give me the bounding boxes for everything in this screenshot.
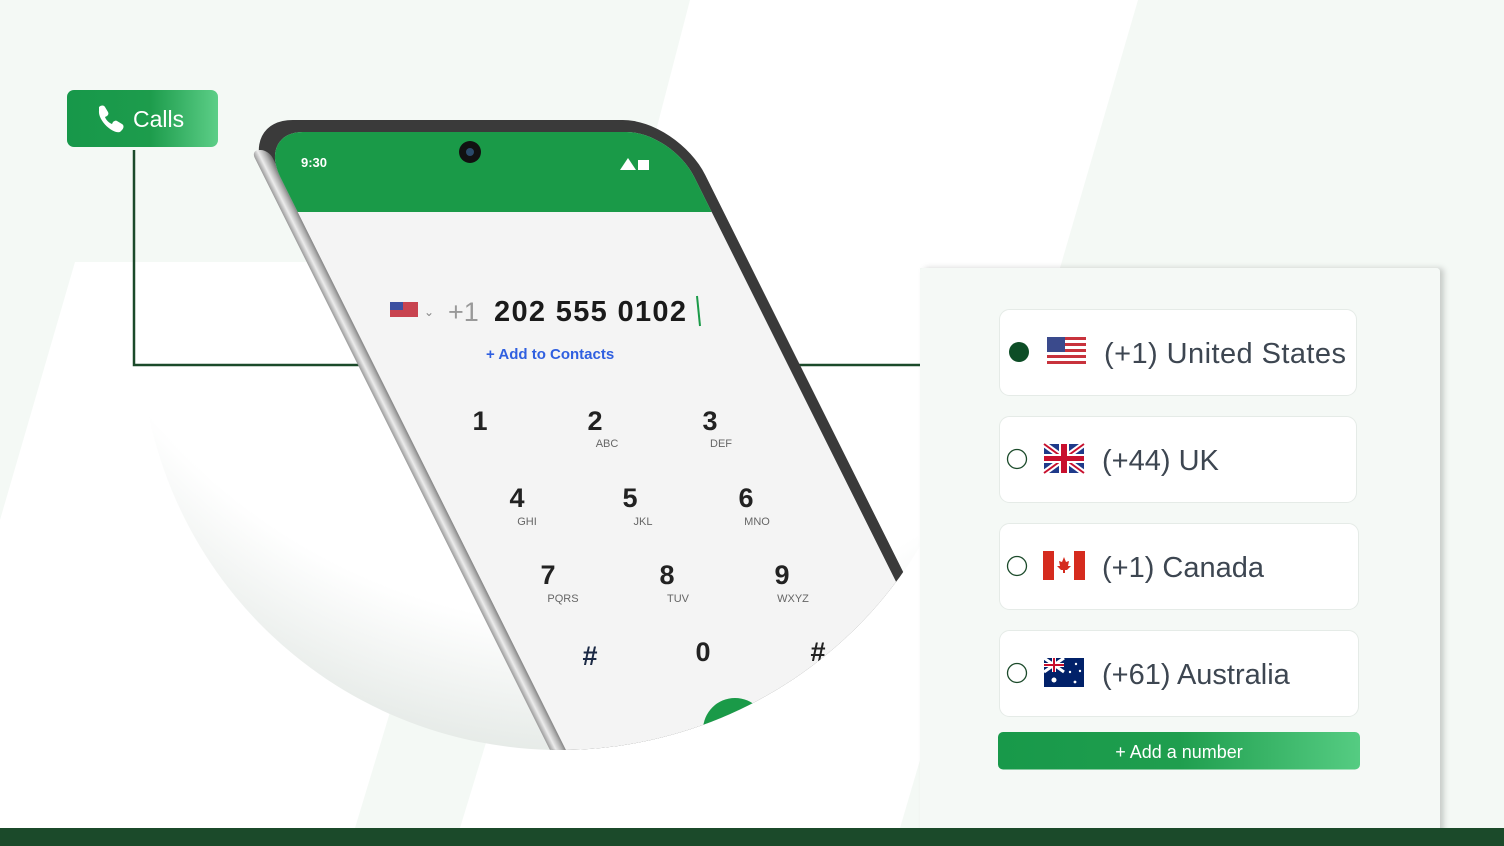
add to contacts: + Add to Contacts: [486, 346, 614, 363]
phone screen content: MNO: [744, 516, 770, 528]
phone frame: [258, 120, 904, 750]
call button: [703, 698, 753, 725]
keypad: 0: [695, 637, 711, 667]
dial number: +1: [448, 297, 479, 327]
option: Australia: [1000, 630, 1358, 716]
backdrop circle: [179, 455, 550, 750]
option: Australia: (+61) Australia: [1102, 659, 1291, 691]
phone screen content: DEF: [710, 438, 732, 450]
phone screen content: ABC: [596, 438, 618, 450]
keypad: 5: [622, 483, 638, 513]
connector line: [134, 150, 920, 365]
phone screen content: PQRS: [547, 593, 579, 605]
dial number: [390, 296, 700, 328]
phone screen content: WXYZ: [777, 593, 809, 605]
option: Canada: (+1) Canada: [1102, 552, 1265, 584]
phone screen content: GHI: [517, 516, 537, 528]
footer bar: [0, 828, 1504, 846]
calls button: Calls: [133, 106, 184, 132]
option: UK: [1000, 416, 1356, 502]
option: United States: [1000, 310, 1356, 396]
option: Canada: [1000, 524, 1358, 610]
keypad: #: [810, 637, 826, 667]
keypad: [472, 406, 826, 671]
right panel: [920, 268, 1440, 846]
keypad: 3: [702, 406, 718, 436]
option: United States: (+1) United States: [1104, 338, 1346, 370]
option: UK: (+44) UK: [1102, 445, 1220, 477]
add a number button: + Add a number: [1115, 742, 1243, 762]
keypad: 6: [738, 483, 754, 513]
dial number: 202 555 0102: [494, 296, 686, 328]
phone: [254, 120, 904, 750]
keypad: 4: [509, 483, 525, 513]
add a number button: [998, 732, 1360, 770]
phone screen content: JKL: [634, 516, 652, 528]
keypad: #: [582, 641, 598, 671]
dial number: ⌄: [424, 305, 434, 319]
keypad: 1: [472, 406, 488, 436]
phone screen content: TUV: [667, 593, 690, 605]
background white shapes: [0, 0, 1138, 828]
keypad: 9: [774, 560, 790, 590]
keypad: 2: [587, 406, 603, 436]
calls button: [67, 90, 218, 147]
keypad: 7: [540, 560, 556, 590]
status bar: 9:30: [301, 155, 327, 170]
icon: phone: [99, 106, 124, 132]
keypad: 8: [659, 560, 675, 590]
phone screen content: [301, 141, 826, 762]
